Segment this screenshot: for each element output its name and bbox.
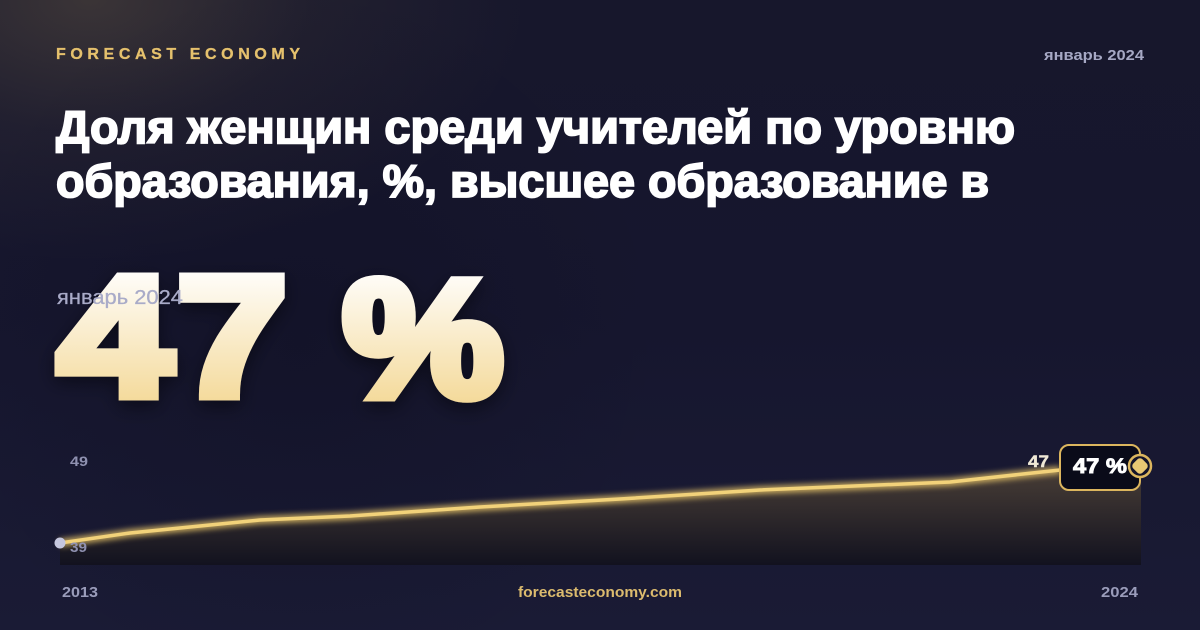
end marker xyxy=(1129,455,1151,477)
y axis min: 39 xyxy=(70,539,87,555)
x axis end: 2024 xyxy=(1101,585,1138,601)
line glow xyxy=(60,470,1060,543)
line chart xyxy=(54,445,1151,565)
date under title overlapping value: январь 2024 xyxy=(57,287,183,309)
website: forecasteconomy.com xyxy=(518,585,682,601)
last value label: 47 xyxy=(1028,452,1049,471)
title xyxy=(56,101,1015,207)
y axis max: 49 xyxy=(70,453,88,469)
value callout: 47 % xyxy=(1073,455,1127,478)
line xyxy=(60,470,1060,543)
big value: 7 xyxy=(177,242,287,432)
area under line xyxy=(60,466,1141,565)
x axis start: 2013 xyxy=(62,585,98,601)
brand label: FORECAST ECONOMY xyxy=(56,46,300,63)
big value xyxy=(58,242,503,432)
big value: 4 xyxy=(58,242,172,432)
title: образования, %, высшее образование в xyxy=(56,155,989,207)
date top right: январь 2024 xyxy=(1044,47,1145,64)
value callout xyxy=(1060,445,1140,490)
title: Доля женщин среди учителей по уровню xyxy=(56,101,1015,153)
big value: % xyxy=(343,247,503,432)
start point xyxy=(54,538,66,548)
